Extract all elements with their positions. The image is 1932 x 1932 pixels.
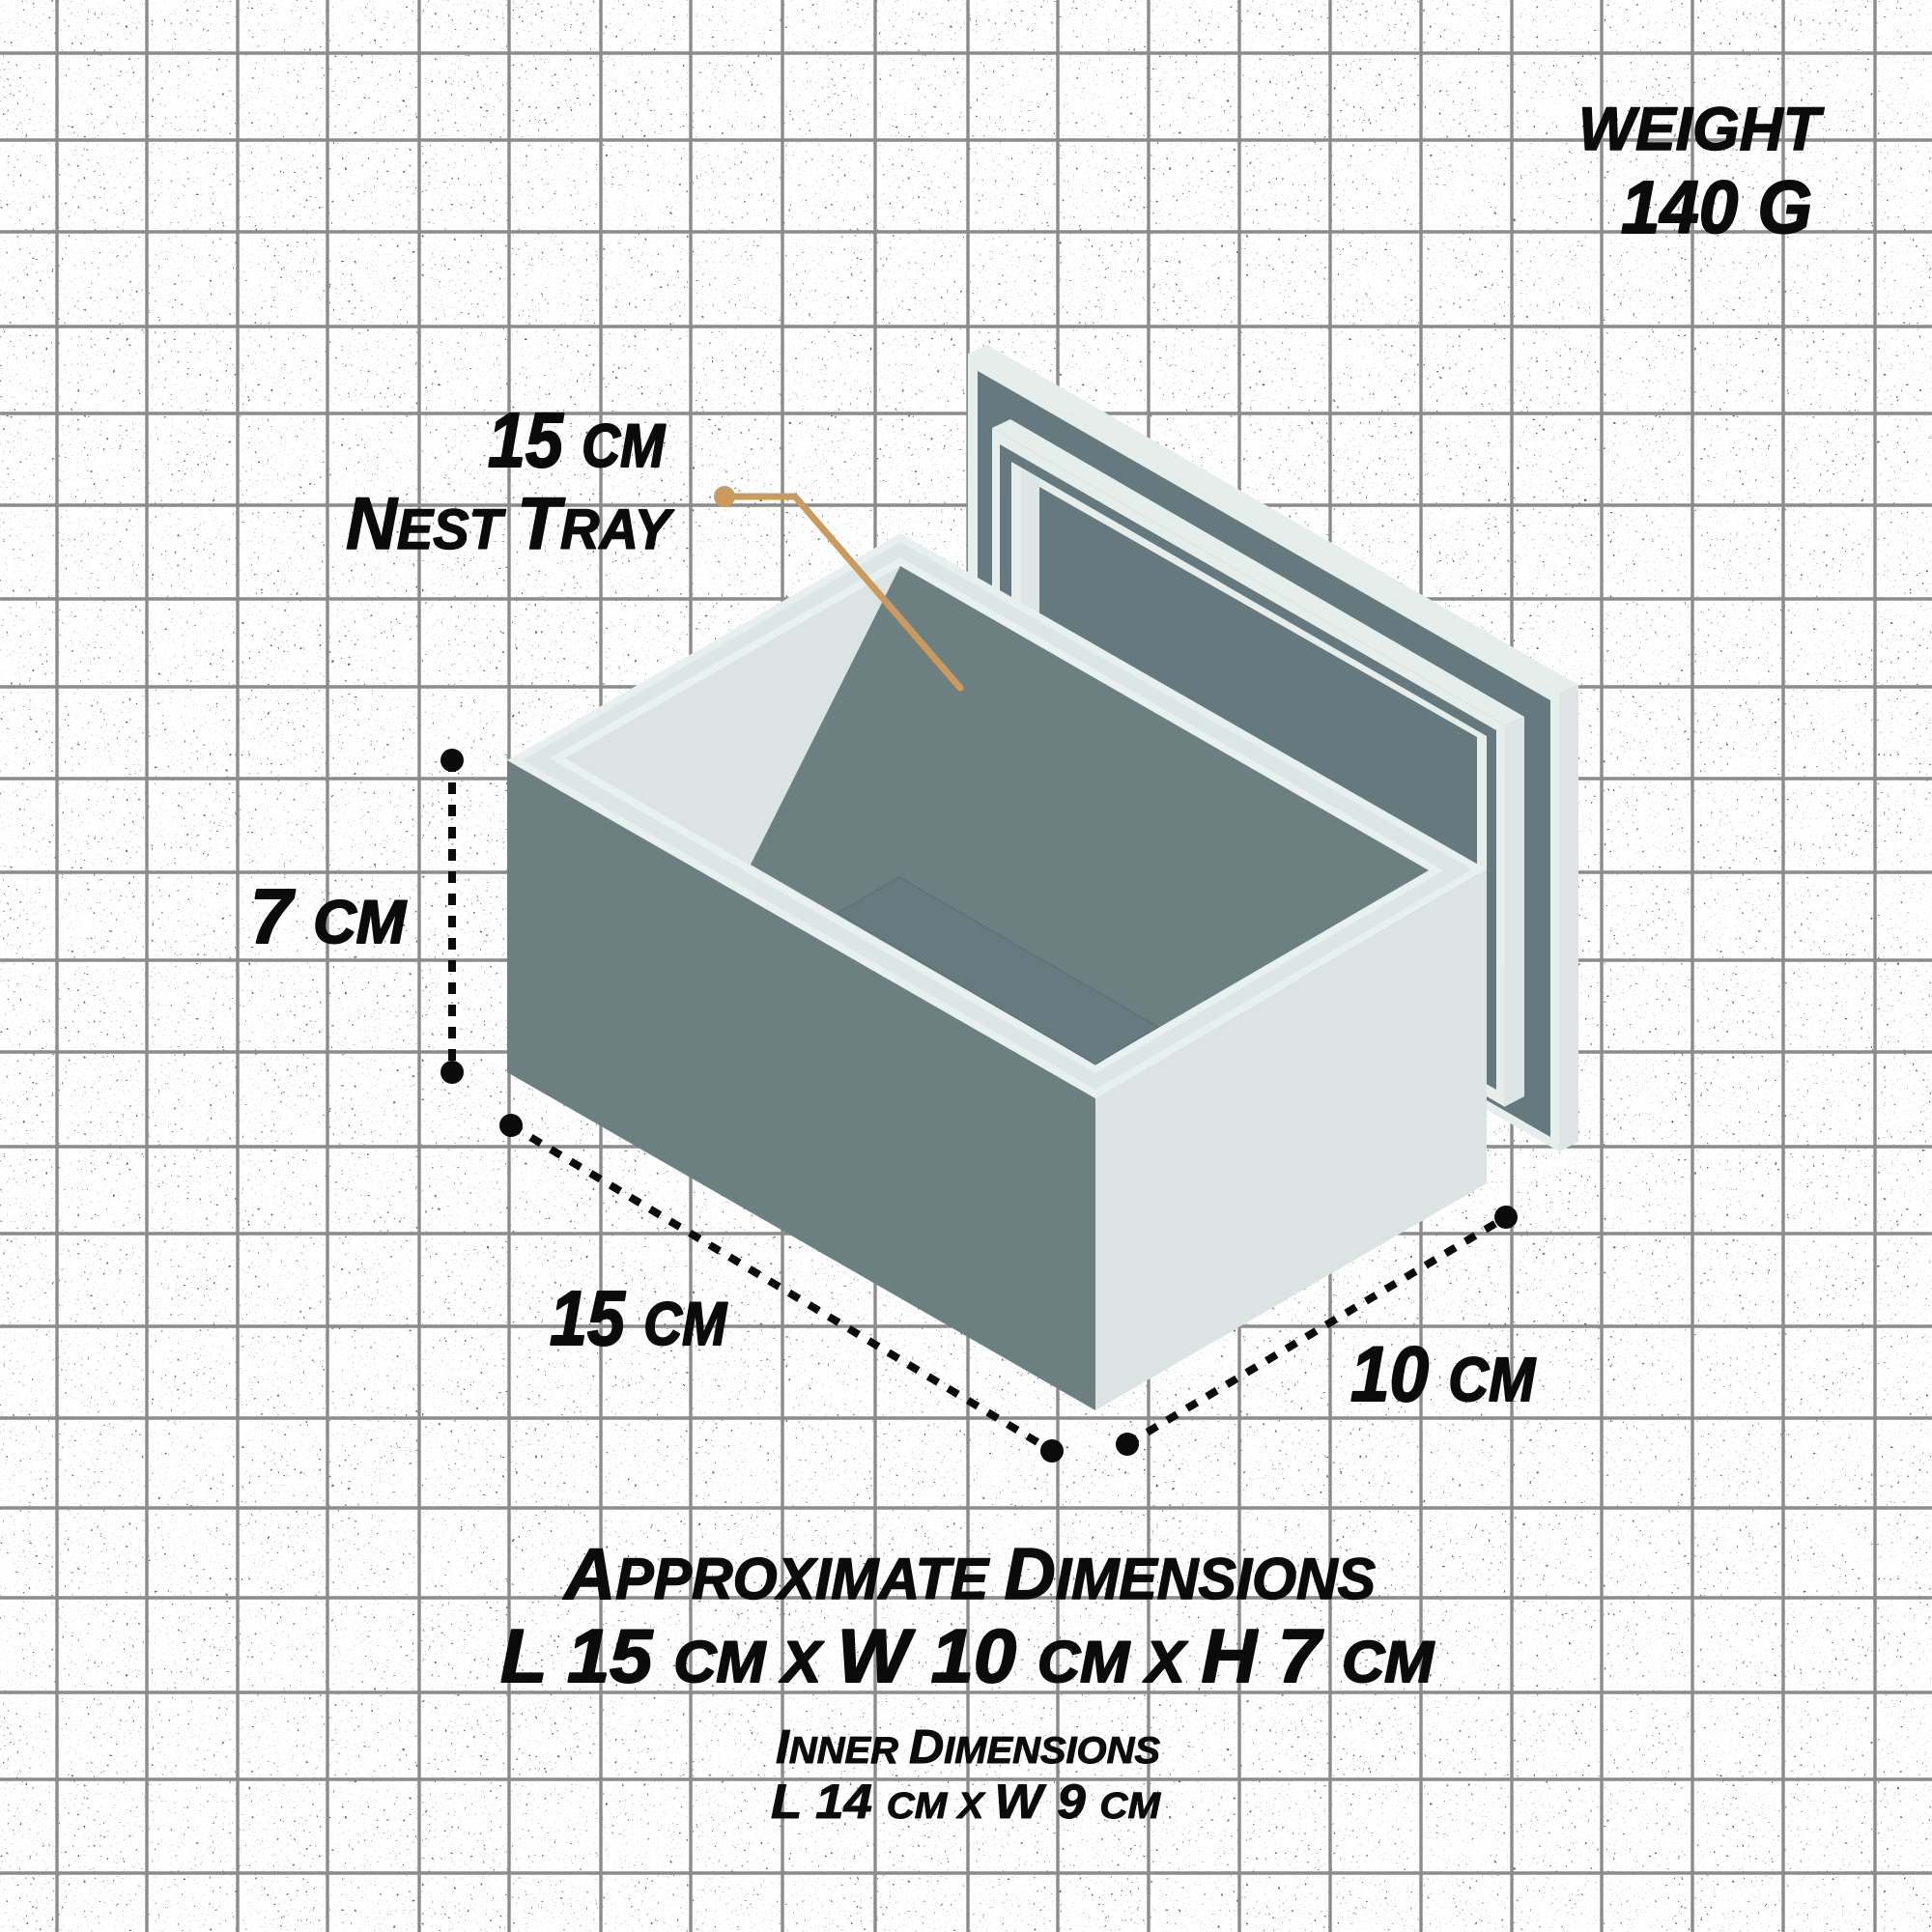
length dimension marker — [499, 1114, 1064, 1463]
length label: 15 CM — [550, 1275, 727, 1361]
box floor — [838, 877, 1158, 1065]
height dimension marker — [440, 749, 464, 1084]
weight label: WEIGHT — [1578, 96, 1824, 163]
width label: 10 CM — [1350, 1331, 1537, 1418]
nest tray label: NEST TRAY — [346, 483, 675, 565]
weight label: 140 G — [1621, 166, 1812, 249]
box front-left face — [507, 760, 1095, 1410]
height label: 7 CM — [250, 873, 407, 959]
nest tray label — [346, 397, 675, 565]
lid standing behind the box — [968, 345, 1578, 1151]
inner dimensions heading: INNER DIMENSIONS — [776, 1721, 1160, 1774]
nest tray label: 15 CM — [488, 397, 666, 483]
lid outer frame — [968, 345, 1578, 1151]
box top rim — [507, 533, 1487, 1098]
weight label — [1578, 96, 1824, 249]
width dimension marker — [1116, 1206, 1518, 1456]
inner dimensions line: L 14 CM X W 9 CM — [771, 1775, 1161, 1829]
outer dimensions line: L 15 CM X W 10 CM X H 7 CM — [500, 1613, 1435, 1698]
lid inner raised tier — [992, 419, 1524, 1107]
nest tray leader line — [714, 486, 960, 688]
approximate dimensions heading: APPROXIMATE DIMENSIONS — [562, 1533, 1376, 1614]
open box — [507, 533, 1487, 1410]
box front-right face — [1095, 869, 1487, 1410]
box interior — [565, 566, 1429, 1065]
